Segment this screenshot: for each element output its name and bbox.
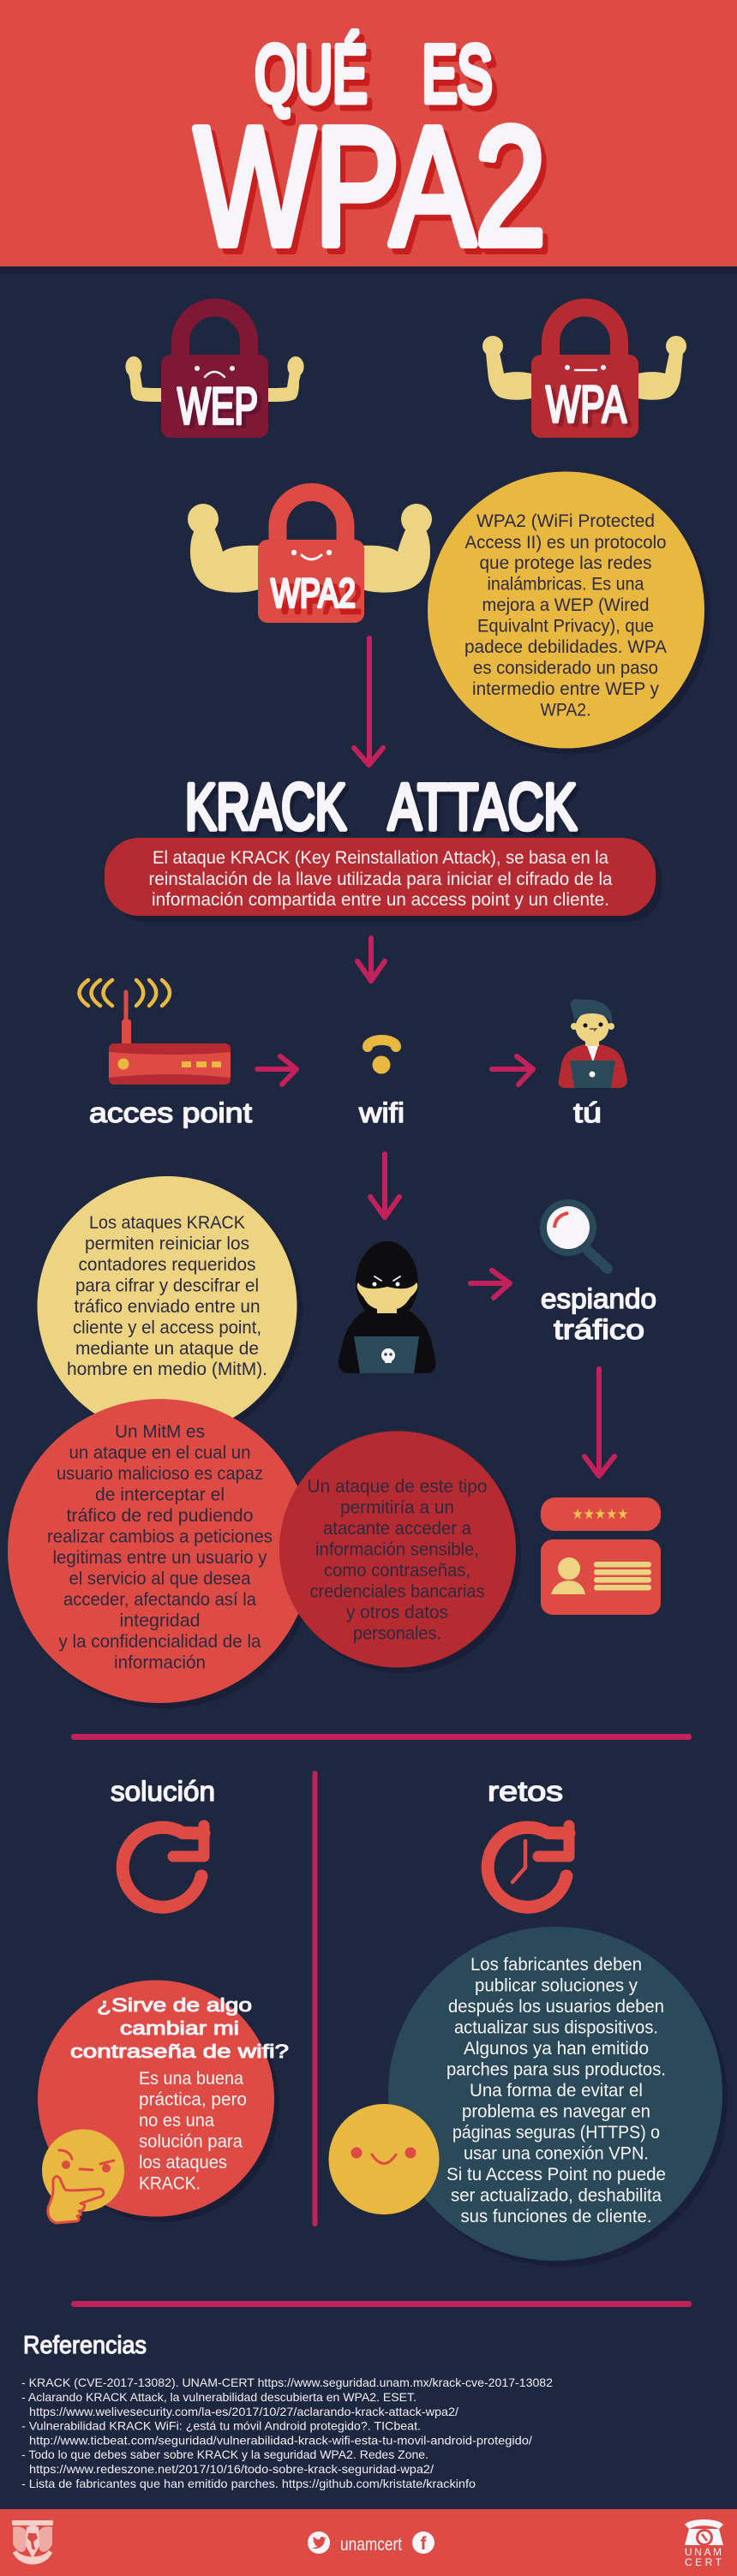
icon: WEP padlock (125, 308, 304, 438)
panel: attack consequences: credenciales bancarias (310, 1581, 485, 1602)
icon: router (79, 980, 231, 1085)
panel: KRACK attacks explanation: mediante un ataque de (75, 1339, 259, 1359)
label: wifi: wifi (358, 1097, 404, 1128)
heading: solución: solución (111, 1776, 215, 1807)
text block: references: https://www.redeszone.net/2017/10/16/todo-sobre-krack-seguridad-wpa2/ (29, 2462, 434, 2476)
question heading: contraseña de wifi? (70, 2041, 289, 2062)
panel: WPA2 definition: inalámbricas. Es una (487, 574, 644, 595)
panel: WPA2 definition: WPA2. (540, 701, 591, 720)
panel: KRACK attacks explanation: Los ataques KRACK (89, 1213, 245, 1233)
answer text: KRACK. (139, 2174, 201, 2193)
icon: clock with reload arrow (488, 1826, 569, 1907)
panel: MitM definition: y la confidencialidad de la (58, 1632, 261, 1652)
question heading (70, 1994, 289, 2062)
question heading: ¿Sirve de algo (97, 1994, 252, 2016)
panel: challenges: después los usuarios deben (448, 1997, 664, 2017)
panel: WPA2 definition: es considerado un paso (473, 658, 658, 678)
icon: WPA2 padlock (188, 492, 432, 623)
label: acces point: acces point (89, 1097, 252, 1128)
panel: KRACK description: El ataque KRACK (Key Reinstallation Attack), se basa en la (153, 848, 608, 868)
answer text: solución para (139, 2131, 243, 2152)
panel: challenges: sus funciones de cliente. (461, 2207, 651, 2226)
text block: references: - Lista de fabricantes que han emitido parches. https://github.com/kristate/krackinfo (21, 2477, 476, 2490)
icon: password field (541, 1497, 661, 1531)
heading: KRACK ATTACK: KRACK (185, 771, 346, 844)
icon: WEP padlock: WEP (177, 377, 258, 435)
label: espiando tráfico (541, 1283, 656, 1345)
panel: MitM definition: de interceptar el (95, 1485, 225, 1504)
panel: KRACK attacks explanation: permiten reiniciar los (85, 1234, 249, 1254)
panel: challenges: ser actualizado, deshabilita (451, 2186, 662, 2205)
panel: WPA2 definition: mejora a WEP (Wired (482, 595, 650, 615)
title: Qué es WPA2: WPA2 (195, 93, 546, 280)
panel: MitM definition: información (114, 1653, 206, 1672)
arrow: router to wifi (257, 1056, 297, 1085)
panel: MitM definition: tráfico de red pudiendo (67, 1506, 254, 1526)
panel: attack consequences: y otros datos (346, 1603, 448, 1623)
answer text: los ataques (139, 2153, 227, 2173)
label: espiando tráfico: espiando (541, 1283, 656, 1314)
icon: UNAM-CERT logo: CERT (685, 2556, 722, 2568)
panel: challenges: Algunos ya han emitido (464, 2039, 649, 2059)
panel: attack consequences: información sensible, (315, 1540, 479, 1559)
icon: wifi (368, 1040, 396, 1074)
panel: KRACK attacks explanation: hombre en medio (MitM). (67, 1360, 267, 1379)
icon: password field: ★★★★★ (572, 1506, 629, 1523)
panel: MitM definition: el servicio al que desea (69, 1569, 251, 1588)
arrow: wifi to user (492, 1056, 533, 1085)
icon: thinking emoji (42, 2130, 124, 2223)
icon: reload arrow (123, 1826, 204, 1907)
icon: ID card (541, 1539, 661, 1615)
panel: attack consequences: como contraseñas, (324, 1561, 470, 1581)
panel: challenges: Los fabricantes deben (470, 1955, 642, 1975)
panel: WPA2 definition (428, 471, 710, 754)
panel: MitM definition: usuario malicioso es capaz (57, 1464, 263, 1484)
icon: facebook (412, 2531, 434, 2554)
panel: challenges: actualizar sus dispositivos. (454, 2018, 658, 2037)
arrow: hacker to spying (470, 1270, 510, 1298)
panel: MitM definition: integridad (120, 1611, 201, 1631)
icon: UNAM-CERT logo: UNAM (685, 2546, 722, 2558)
text block: references: - Vulnerabilidad KRACK WiFi: ¿está tu móvil Android protegido?. TICbeat. (21, 2419, 421, 2433)
answer text (139, 2069, 247, 2193)
icon: facebook: f (420, 2534, 427, 2554)
icon: user with laptop (558, 999, 627, 1088)
arrow: wifi to hacker (370, 1154, 399, 1217)
heading: KRACK ATTACK (185, 771, 577, 844)
panel: WPA2 definition: Equivalnt Privacy), que (477, 617, 654, 636)
icon: magnifying glass (540, 1199, 608, 1269)
panel: WPA2 definition: que protege las redes (480, 553, 651, 573)
panel: attack consequences: personales. (353, 1624, 441, 1643)
icon: UNAM shield (12, 2520, 53, 2565)
title: Qué es WPA2 (195, 29, 546, 280)
panel: attack consequences: atacante acceder a (323, 1519, 471, 1539)
panel: attack consequences: Un ataque de este tipo (307, 1477, 487, 1497)
arrow: WPA2 to KRACK (354, 638, 383, 765)
title: Qué es WPA2: QUÉ (255, 29, 367, 118)
panel: WPA2 definition: padece debilidades. WPA (464, 637, 667, 657)
icon: twitter (308, 2531, 330, 2554)
label: tú: tú (573, 1097, 602, 1128)
panel: attack consequences (279, 1431, 521, 1673)
arrow: spying to credentials (584, 1369, 614, 1476)
icon: WPA padlock: WPA (546, 375, 626, 433)
panel: KRACK attacks explanation (38, 1176, 302, 1441)
panel: challenges: Una forma de evitar el (470, 2081, 643, 2101)
heading: Referencias: Referencias (23, 2332, 147, 2359)
panel: MitM definition: acceder, afectando así la (63, 1590, 256, 1610)
icon: WPA2 padlock: WPA2 (271, 571, 356, 615)
panel: challenges (388, 1927, 728, 2267)
panel: KRACK description: reinstalación de la llave utilizada para iniciar el cifrado de la (149, 870, 613, 889)
panel: WPA2 definition: WPA2 (WiFi Protected (476, 511, 655, 531)
text block: references: http://www.ticbeat.com/seguridad/vulnerabilidad-krack-wifi-esta-tu-movil-android-protegido/ (29, 2433, 532, 2447)
panel: KRACK attacks explanation: para cifrar y descifrar el (75, 1276, 259, 1295)
panel: KRACK attacks explanation: tráfico enviado entre un (74, 1297, 261, 1317)
header banner (0, 0, 737, 280)
panel: MitM definition: realizar cambios a peticiones (47, 1527, 273, 1547)
panel: challenges: usar una conexión VPN. (464, 2143, 649, 2164)
panel: MitM definition: un ataque en el cual un (69, 1443, 250, 1463)
panel: password question (38, 1981, 289, 2222)
panel: KRACK description (105, 838, 662, 922)
icon: hacker with laptop (339, 1241, 436, 1373)
text block: references: https://www.welivesecurity.com/la-es/2017/10/27/aclarando-krack-attack-wpa2/ (29, 2405, 458, 2418)
text block: references: - Aclarando KRACK Attack, la vulnerabilidad descubierta en WPA2. ESET. (21, 2390, 416, 2404)
text block: references: - Todo lo que debes saber sobre KRACK y la seguridad WPA2. Redes Zone. (21, 2447, 428, 2461)
answer text: práctica, pero (139, 2090, 247, 2109)
panel: MitM definition: Un MitM es (115, 1422, 205, 1442)
panel: challenges: publicar soluciones y (475, 1975, 638, 1996)
footer (0, 2509, 737, 2576)
panel: challenges: páginas seguras (HTTPS) o (452, 2123, 660, 2143)
icon: smiling emoji (329, 2104, 439, 2214)
answer text: no es una (139, 2111, 214, 2131)
arrow: description to wifi (357, 938, 385, 981)
question heading: cambiar mi (120, 2017, 239, 2039)
text block: references (21, 2376, 553, 2490)
panel: MitM definition (8, 1399, 317, 1708)
icon: UNAM-CERT logo (685, 2519, 723, 2568)
text block: references: - KRACK (CVE-2017-13082). UNAM-CERT https://www.seguridad.unam.mx/krack-cve-2017-13082 (21, 2376, 553, 2389)
panel: KRACK attacks explanation: contadores requeridos (79, 1255, 255, 1275)
panel: MitM definition: legitimas entre un usuario y (53, 1548, 267, 1568)
label: espiando tráfico: tráfico (554, 1314, 644, 1345)
icon: WPA padlock (482, 308, 686, 438)
panel: challenges: parches para sus productos. (446, 2059, 666, 2080)
answer text: Es una buena (139, 2069, 243, 2089)
heading: retos: retos (488, 1776, 563, 1807)
panel: challenges: problema es navegar en (462, 2102, 650, 2121)
panel: KRACK description: información compartida entre un access point y un cliente. (152, 890, 609, 910)
panel: attack consequences: permitiría a un (340, 1497, 454, 1518)
panel: WPA2 definition: intermedio entre WEP y (472, 679, 659, 699)
heading: KRACK ATTACK: ATTACK (388, 771, 577, 844)
panel: KRACK attacks explanation: cliente y el access point, (73, 1318, 261, 1338)
title: Qué es WPA2: ES (422, 29, 492, 118)
panel: challenges: Si tu Access Point no puede (446, 2165, 666, 2185)
label: unamcert: unamcert (340, 2535, 402, 2555)
panel: WPA2 definition: Access II) es un protocolo (464, 533, 667, 553)
